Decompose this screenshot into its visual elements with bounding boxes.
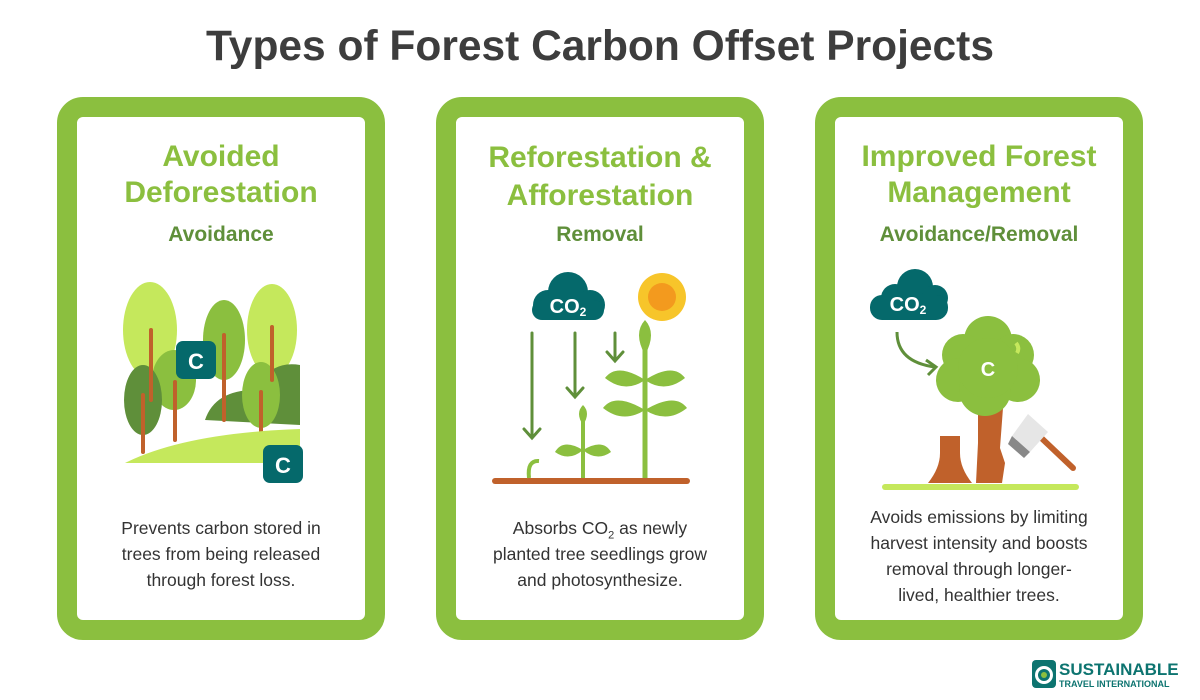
icon: tree with axe: CO: [890, 294, 920, 316]
heading: Improved Forest: [861, 140, 1097, 173]
body text: removal through longer-: [886, 559, 1072, 579]
panel: reforestation: [436, 97, 764, 640]
heading: [861, 140, 1097, 209]
body text: trees from being released: [122, 544, 320, 564]
heading: [124, 140, 318, 209]
body text: [493, 518, 707, 590]
heading: Avoided: [162, 140, 280, 173]
body text: [870, 507, 1088, 605]
body text: harvest intensity and boosts: [871, 533, 1087, 553]
body text: planted tree seedlings grow: [493, 544, 707, 564]
heading: Afforestation: [507, 179, 693, 212]
subheading: Avoidance/Removal: [880, 223, 1078, 246]
body text: through forest loss.: [147, 570, 295, 590]
body text: and photosynthesize.: [517, 570, 683, 590]
icon: forest: C: [188, 349, 204, 374]
logo: [1032, 660, 1179, 689]
subheading: Avoidance: [168, 223, 274, 246]
panel: improved forest management: [815, 97, 1143, 640]
heading: Deforestation: [124, 176, 318, 209]
heading: [488, 141, 712, 212]
logo: SUSTAINABLE: [1059, 660, 1179, 679]
icon: tree with axe: 2: [920, 303, 927, 317]
body text: lived, healthier trees.: [898, 585, 1060, 605]
heading: Reforestation &: [488, 141, 712, 174]
subheading: Removal: [556, 223, 644, 246]
body text: Absorbs CO2 as newly: [513, 518, 687, 542]
icon: forest: C: [275, 453, 291, 478]
body text: Prevents carbon stored in: [121, 518, 321, 538]
icon: seedlings with co2 and sun: 2: [580, 305, 587, 319]
icon: tree with axe: C: [981, 359, 995, 381]
logo: TRAVEL INTERNATIONAL: [1059, 679, 1170, 689]
panel: avoided deforestation: [57, 97, 385, 640]
body text: [121, 518, 321, 590]
body text: Avoids emissions by limiting: [870, 507, 1088, 527]
heading: Management: [887, 176, 1071, 209]
icon: seedlings with co2 and sun: CO: [550, 296, 580, 318]
title: Types of Forest Carbon Offset Projects: [206, 23, 994, 70]
